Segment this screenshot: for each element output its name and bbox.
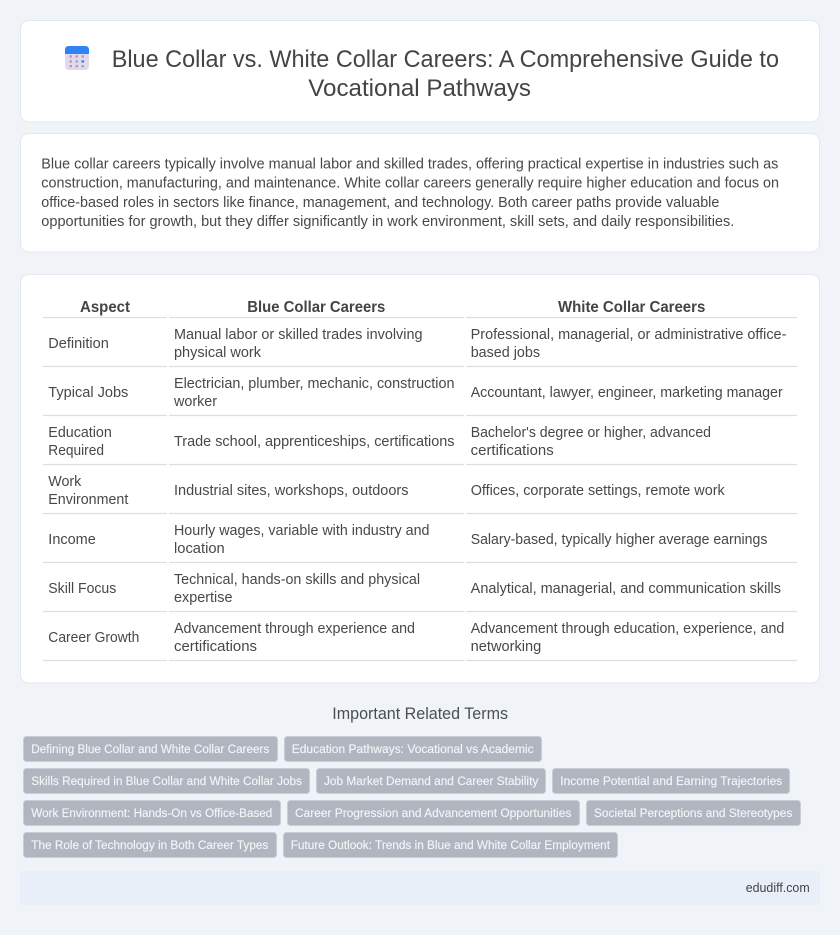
row: income: Salary-based, typically higher average earnings — [471, 532, 767, 548]
row: work environment: Offices, corporate settings, remote work — [471, 483, 725, 499]
table header row: Aspect — [80, 299, 131, 316]
tags: related terms: The Role of Technology in Both Career Types — [31, 838, 268, 852]
table header row: Blue Collar Careers — [247, 299, 385, 316]
intro text: Blue collar careers typically involve manual labor and skilled trades, offering practical expertise in industries such as — [41, 156, 778, 172]
tags: related terms — [24, 736, 800, 858]
intro text: office-based roles in sectors like finance, management, and technology. Both career paths provide valuable — [41, 195, 719, 211]
row: typical jobs — [48, 376, 783, 410]
tags: related terms: Future Outlook: Trends in Blue and White Collar Employment — [291, 838, 611, 852]
row: education required: Bachelor's degree or higher, advanced — [471, 425, 711, 441]
row: definition: physical work — [174, 345, 262, 361]
row: definition — [48, 327, 787, 361]
title: Vocational Pathways — [308, 75, 531, 102]
icon: calendar — [65, 46, 89, 70]
tags: related terms: Skills Required in Blue Collar and White Collar Jobs — [31, 774, 302, 788]
row: income — [48, 523, 767, 557]
row: education required: Trade school, apprenticeships, certifications — [174, 434, 454, 450]
panel: comparison table — [20, 274, 820, 683]
panel: header — [20, 20, 820, 122]
tags: related terms: Societal Perceptions and Stereotypes — [594, 806, 792, 820]
tags: related terms: Defining Blue Collar and White Collar Careers — [31, 742, 269, 756]
tags: related terms: Education Pathways: Vocational vs Academic — [292, 742, 534, 756]
row: education required — [48, 425, 711, 459]
panel: intro — [20, 134, 820, 252]
title — [112, 46, 779, 102]
row: career growth: Advancement through education, experience, and — [471, 621, 784, 637]
intro text — [41, 156, 779, 230]
row: typical jobs: Accountant, lawyer, engineer, marketing manager — [471, 385, 783, 401]
footer — [20, 871, 820, 905]
row: career growth: networking — [471, 639, 541, 655]
tags: related terms: Job Market Demand and Career Stability — [324, 774, 539, 788]
row: career growth — [48, 621, 784, 655]
tags: related terms: Work Environment: Hands-On vs Office-Based — [31, 806, 272, 820]
row: typical jobs: worker — [173, 394, 217, 410]
row: income: Income — [48, 532, 96, 548]
row: skill focus: Skill Focus — [48, 581, 116, 597]
row: career growth: Career Growth — [48, 630, 139, 646]
tags: related terms: Career Progression and Advancement Opportunities — [295, 806, 571, 820]
row: education required: Education — [48, 425, 112, 441]
row: skill focus: Technical, hands-on skills and physical — [174, 572, 420, 588]
row: career growth: certifications — [174, 639, 257, 655]
intro text: opportunities for growth, but they differ significantly in work environment, skill sets, and daily responsibilities. — [41, 214, 734, 230]
table header row — [80, 299, 705, 316]
heading: important related terms: Important Related Terms — [332, 705, 508, 723]
table header row: White Collar Careers — [558, 299, 705, 316]
row: income: Hourly wages, variable with industry and — [174, 523, 430, 539]
footer: edudiff.com — [746, 880, 810, 895]
tags: related terms: Income Potential and Earning Trajectories — [560, 774, 782, 788]
row: skill focus: expertise — [174, 590, 232, 606]
row: income: location — [174, 541, 225, 557]
row: definition: based jobs — [471, 345, 540, 361]
row: career growth: Advancement through experience and — [174, 621, 415, 637]
row: skill focus — [48, 572, 781, 606]
intro text: construction, manufacturing, and maintenance. White collar careers generally require higher education and focus on — [41, 176, 779, 192]
row: definition: Definition — [48, 336, 109, 352]
title: Blue Collar vs. White Collar Careers: A Comprehensive Guide to — [112, 46, 779, 73]
row: work environment — [48, 474, 725, 508]
row: skill focus: Analytical, managerial, and communication skills — [471, 581, 781, 597]
row: typical jobs: Typical Jobs — [48, 385, 128, 401]
row: education required: certifications — [471, 443, 554, 459]
row: work environment: Industrial sites, workshops, outdoors — [174, 483, 408, 499]
row: work environment: Environment — [48, 492, 128, 508]
row: work environment: Work — [48, 474, 82, 490]
row: education required: Required — [48, 443, 104, 459]
row: typical jobs: Electrician, plumber, mechanic, construction — [174, 376, 454, 392]
row: definition: Manual labor or skilled trades involving — [174, 327, 422, 343]
row: definition: Professional, managerial, or administrative office- — [471, 327, 787, 343]
